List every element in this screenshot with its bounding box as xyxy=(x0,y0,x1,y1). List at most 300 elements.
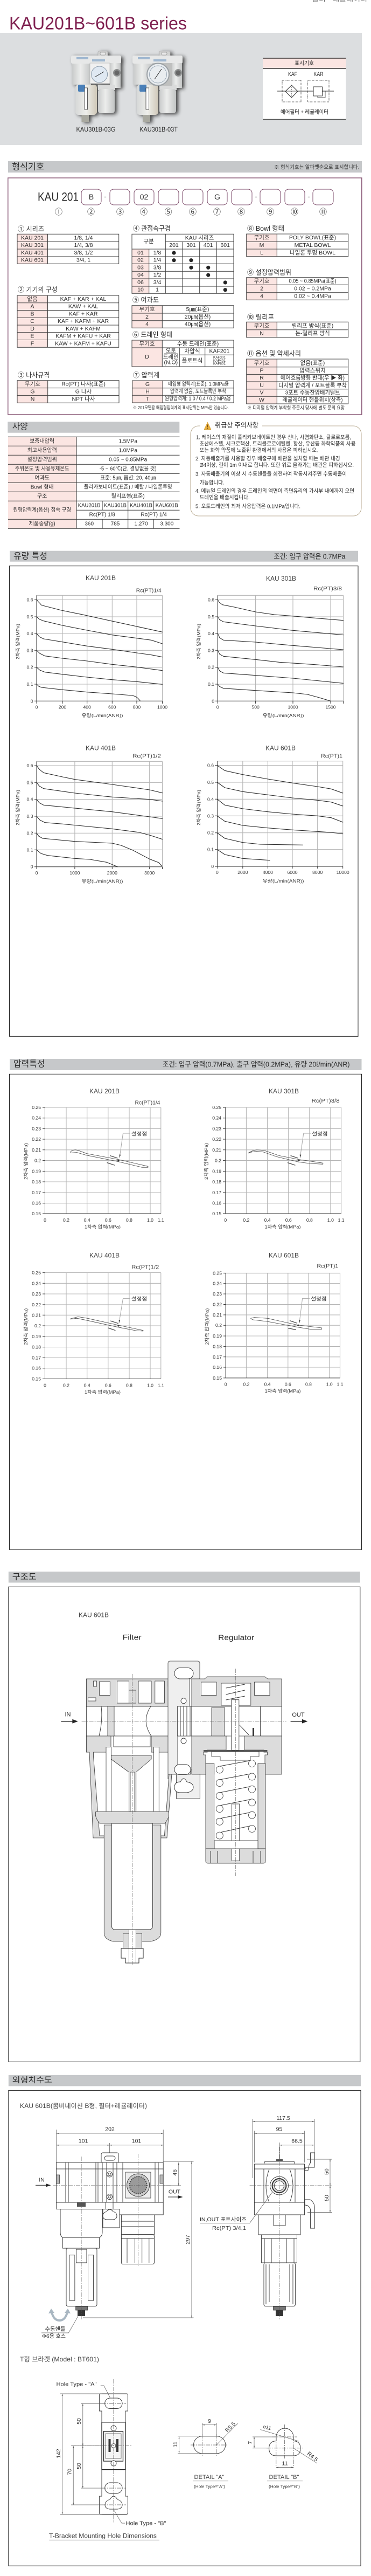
table: relief: 릴리프 방식(표준) xyxy=(292,322,333,329)
table: specifications: 제품중량(g) xyxy=(29,520,55,527)
dimension drawing: detail A xyxy=(172,2418,238,2489)
dimension drawing: side view: 117.5 xyxy=(276,2115,290,2122)
table: drain type: KAF601 xyxy=(213,362,226,366)
heading: structure xyxy=(9,1572,360,1583)
diagram labels xyxy=(65,1613,305,1718)
table: port size: 1/2 xyxy=(153,272,161,278)
line chart: KAU 201B pressure: 0.21 xyxy=(32,1147,41,1153)
line chart: KAU 201B flow: 0.2 xyxy=(27,665,33,670)
dimension drawing: side view: Rc(PT) 3/4,1 xyxy=(212,2225,246,2231)
model code row: ⑪ xyxy=(319,208,327,216)
line chart: KAU 601B pressure: 0.22 xyxy=(213,1301,222,1307)
table: specifications: -5 ~ 60℃(단, 결빙없을 것) xyxy=(100,465,157,472)
table: drain type: ⑥ 드레인 형태 xyxy=(132,331,172,339)
line chart: KAU 401B pressure: 0.4 xyxy=(84,1382,90,1388)
dimension drawing: T bracket: 70 xyxy=(67,2469,73,2475)
table: device configuration: KAFM + KAFU + KAR xyxy=(55,333,111,340)
table: set pressure range: 0.02 ~ 0.4MPa xyxy=(294,293,331,300)
line chart: KAU 601B pressure: 1.0 xyxy=(326,1381,333,1387)
line chart: KAU 301B pressure: 0.25 xyxy=(212,1105,221,1110)
line chart: KAU 601B pressure: 1.1 xyxy=(337,1381,344,1387)
line chart: KAU 401B pressure: 0 xyxy=(44,1382,46,1388)
line chart: KAU 401B pressure: 1.1 xyxy=(158,1382,164,1388)
dimension drawing: front view xyxy=(36,2126,194,2339)
diagram labels: IN xyxy=(65,1711,71,1718)
table: pressure gauge: ⑦ 압력계 xyxy=(133,371,159,379)
line chart: KAU 201B flow: 0.5 xyxy=(27,614,33,619)
table: drain type: D xyxy=(145,354,149,360)
dimension drawing: front view: 202 xyxy=(105,2126,115,2133)
model code row: ⑨ xyxy=(267,208,274,216)
line chart: KAU 201B pressure: 0.16 xyxy=(32,1201,41,1206)
line chart: KAU 201B pressure: 0.17 xyxy=(32,1190,41,1195)
line chart: KAU 201B pressure: 1차측 압력(MPa) xyxy=(85,1224,121,1230)
table: device configuration xyxy=(17,286,119,347)
line chart: KAU 301B flow: 1500 xyxy=(325,704,336,710)
table: set pressure range: 무기호 xyxy=(254,278,270,285)
line chart: KAU 301B flow: Rc(PT)3/8 xyxy=(313,586,342,592)
product caption: KAU301B-03G xyxy=(76,126,115,133)
table: device configuration: B xyxy=(30,311,34,317)
table: series: 1/4, 3/8 xyxy=(74,242,93,249)
line chart: KAU 301B flow: 2차측 압력(MPa) xyxy=(195,624,201,659)
heading: flow characteristics: 유량 특성 xyxy=(13,551,47,561)
line chart: KAU 201B pressure: Rc(PT)1/4 xyxy=(135,1099,160,1106)
table: drain type: 수동 드레인(표준) xyxy=(177,341,219,347)
line chart: KAU 601B pressure: 1차측 압력(MPa) xyxy=(265,1388,301,1394)
panel: structure diagram xyxy=(9,1587,360,2062)
panel: model code selection xyxy=(8,178,362,415)
product photo: KAU301B-03T xyxy=(132,51,183,122)
line chart: KAU 601B pressure: 0.23 xyxy=(213,1291,222,1297)
line chart: KAU 401B flow: 유량(L/min(ANR)) xyxy=(82,878,123,884)
line chart: KAU 201B pressure: 0.19 xyxy=(32,1168,41,1174)
table: drain type: 드레인 xyxy=(163,354,179,360)
dimension drawing: detail B: 11 xyxy=(282,2461,288,2467)
model code row: ⑧ xyxy=(237,208,245,216)
line chart: KAU 201B flow: 800 xyxy=(133,704,141,710)
line chart: KAU 401B pressure: 0.25 xyxy=(32,1270,41,1276)
spring xyxy=(216,1760,255,1839)
line chart: KAU 601B pressure xyxy=(204,1253,344,1394)
table: pressure gauge: 매입형 압력계(표준): 1.0MPa용 xyxy=(168,380,229,387)
table: specifications: 360 xyxy=(85,521,94,527)
table: specifications: 1.0MPa xyxy=(118,447,137,453)
line chart: KAU 301B flow: 0.5 xyxy=(208,614,214,619)
heading: model code: 형식기호 xyxy=(12,162,44,171)
dimension drawing: front view: 101 xyxy=(132,2138,141,2145)
line chart: KAU 601B pressure: Rc(PT)1 xyxy=(317,1263,339,1270)
panel: pressure characteristics xyxy=(10,1074,362,1549)
line chart: KAU 301B pressure: 0.22 xyxy=(212,1137,221,1142)
table: series: KAU 301 xyxy=(21,242,44,249)
model code row: G xyxy=(214,192,220,201)
line chart: KAU 301B pressure: 0.15 xyxy=(212,1211,221,1216)
table: relief: 논-릴리프 방식 xyxy=(295,330,330,337)
diagram labels: OUT xyxy=(292,1712,305,1718)
table: set pressure range: 4 xyxy=(260,293,263,300)
table: options and accessories: ⑪ 옵션 및 악세사리 xyxy=(247,350,301,357)
model code row: - xyxy=(307,192,310,201)
line chart: KAU 301B flow: 0.6 xyxy=(208,597,214,603)
table: set pressure range: 0.05 ~ 0.85MPa(표준) xyxy=(289,278,336,285)
cross-section: center bracket xyxy=(168,1661,200,1799)
arrow: out xyxy=(291,1720,307,1723)
table: specifications: 여과도 xyxy=(34,474,50,481)
product caption: KAU301B-03T xyxy=(139,126,178,133)
dimension drawing: side view: 50 xyxy=(324,2168,330,2175)
line chart: KAU 201B pressure: 0.2 xyxy=(63,1217,69,1223)
model code row: ① xyxy=(55,208,62,216)
line chart: KAU 601B flow: 8000 xyxy=(312,870,323,875)
line chart: KAU 601B pressure: 0 xyxy=(225,1381,227,1387)
line chart: KAU 201B flow: Rc(PT)1/4 xyxy=(136,587,162,594)
line chart: KAU 301B flow: 0.2 xyxy=(208,665,214,670)
model code row: KAU 201 xyxy=(38,190,79,204)
table: options and accessories: P xyxy=(260,368,264,374)
subheading: T bracket: T형 브라켓 (Model : BT601) xyxy=(20,2355,99,2363)
line chart: KAU 301B pressure: 0.2 xyxy=(215,1158,221,1163)
line chart: KAU 301B pressure: 0.21 xyxy=(212,1147,221,1153)
dimension drawing: T bracket: 142 xyxy=(55,2449,62,2458)
table: options and accessories: W xyxy=(259,397,264,403)
heading: structure: 구조도 xyxy=(12,1572,37,1582)
model code row: - xyxy=(255,192,257,201)
table: set pressure range: 0.02 ~ 0.2MPa xyxy=(294,286,331,292)
table: port size xyxy=(132,225,234,293)
line chart: KAU 201B pressure: 0.24 xyxy=(32,1115,41,1121)
table: device configuration: A xyxy=(30,304,34,310)
table: relief: 무기호 xyxy=(254,322,270,329)
table: series: ① 시리즈 xyxy=(18,225,44,233)
table: pressure gauge: T xyxy=(146,396,150,402)
table: drain type: KAF201 xyxy=(209,348,230,355)
table: device configuration: E xyxy=(30,333,34,340)
line chart: KAU 201B pressure xyxy=(23,1089,164,1230)
table: filtration: 4 xyxy=(145,321,149,328)
table: drain type: KAF301 xyxy=(213,356,226,360)
table: bowl type: ⑧ Bowl 형태 xyxy=(247,225,284,232)
line chart: KAU 201B pressure: 0.23 xyxy=(32,1126,41,1131)
table: thread standard: N xyxy=(31,396,34,402)
line chart: KAU 601B flow: 10000 xyxy=(337,870,349,875)
table: bowl type: 나일론 투명 BOWL xyxy=(290,249,335,256)
line chart: KAU 301B flow: 0 xyxy=(212,698,214,704)
line chart: KAU 601B flow: 0.4 xyxy=(207,796,214,802)
line chart: KAU 301B pressure: Rc(PT)3/8 xyxy=(312,1098,340,1104)
line chart: KAU 301B pressure: 0.2 xyxy=(243,1217,250,1223)
table: filtration xyxy=(132,297,234,328)
panel: pneumatic symbol: 에어필터 + 레귤레이터 xyxy=(281,109,328,115)
line chart: KAU 401B pressure: KAU 401B xyxy=(89,1253,120,1259)
line chart: KAU 601B flow xyxy=(195,745,349,884)
table: set pressure range: ⑨ 설정압력범위 xyxy=(247,268,291,276)
model code row: ⑥ xyxy=(189,208,197,216)
table: set pressure range: 2 xyxy=(260,286,263,292)
line chart: KAU 201B pressure: 0.15 xyxy=(32,1211,41,1216)
line chart: KAU 601B pressure: 0.18 xyxy=(213,1344,222,1349)
table: specifications: 0.05 ~ 0.85MPa xyxy=(109,457,148,463)
table: filtration: 2 xyxy=(145,314,149,320)
dimension drawing: front view: Φ6용 호스 xyxy=(42,2333,66,2339)
table: series: KAU 201 xyxy=(21,235,44,241)
line chart: KAU 601B pressure: 0.19 xyxy=(213,1333,222,1339)
line chart: KAU 601B flow: 0 xyxy=(211,864,214,869)
table: device configuration: 없음 xyxy=(27,295,38,302)
table: specifications: 1,270 xyxy=(134,521,148,527)
table: options and accessories: V xyxy=(260,389,264,396)
table: series: KAU 601 xyxy=(21,257,44,264)
table: filtration: ⑤ 여과도 xyxy=(132,297,159,304)
line chart: KAU 601B flow: 6000 xyxy=(287,870,298,875)
line chart: KAU 601B pressure: 0.8 xyxy=(305,1381,312,1387)
table: specifications: 폴리카보네이트(표준) / 메탈 / 나일론투명 xyxy=(84,483,172,490)
table: port size: 301 xyxy=(186,242,196,249)
table: options and accessories: 없음(표준) xyxy=(300,359,325,366)
table: thread standard: G 나사 xyxy=(75,388,92,395)
table: port size: 06 xyxy=(137,279,144,286)
line chart: KAU 301B flow: KAU 301B xyxy=(266,576,296,582)
line chart: KAU 401B pressure: 0.17 xyxy=(32,1355,41,1360)
table: options and accessories: 3포트 수동잔압배기밸브 xyxy=(285,389,340,396)
line chart: KAU 301B flow: 500 xyxy=(251,704,260,710)
dimension drawing: detail A: DETAIL "A" xyxy=(194,2474,225,2481)
callout: handling precautions: 1. 케이스의 재질이 폴리카보네이트인 경우 신나, 사염화탄소, 클로로포름, xyxy=(196,433,351,441)
line chart: KAU 401B pressure: 설정점 xyxy=(131,1296,147,1303)
line chart: KAU 201B flow: 0.1 xyxy=(27,681,33,687)
line chart: KAU 201B flow: 200 xyxy=(59,704,66,710)
table: pressure gauge xyxy=(132,371,234,410)
line chart: KAU 601B flow: 0 xyxy=(216,870,219,875)
line chart: KAU 601B flow: KAU 601B xyxy=(265,745,296,752)
model code row: ⑤ xyxy=(165,208,172,216)
line chart: KAU 401B flow: 0.2 xyxy=(27,830,33,836)
line chart: KAU 401B pressure: 0.21 xyxy=(32,1312,41,1318)
panel: outline dimensions xyxy=(9,2090,361,2566)
line chart: KAU 601B flow: 2000 xyxy=(237,870,248,875)
table: device configuration: KAF + KAFM + KAR xyxy=(58,318,109,325)
model code row: ⑦ xyxy=(213,208,221,216)
line chart: KAU 601B flow: 0.5 xyxy=(207,780,214,785)
table: relief: ⑩ 릴리프 xyxy=(247,313,274,321)
line chart: KAU 401B flow: 2차측 압력(MPa) xyxy=(15,790,20,825)
table: thread standard: Rc(PT) 나사(표준) xyxy=(61,381,106,388)
dimension drawing: detail A: 11 xyxy=(172,2441,179,2447)
model code row: ② xyxy=(87,208,95,216)
diagram labels: KAU 601B xyxy=(79,1613,109,1619)
heading: specifications xyxy=(8,422,179,433)
table: device configuration: KAW + KAFM + KAFU xyxy=(55,340,111,347)
line chart: KAU 401B flow: 3000 xyxy=(144,870,155,876)
line chart: KAU 201B pressure: 설정점 xyxy=(131,1131,147,1138)
panel: pneumatic symbol: 표시기호 xyxy=(295,60,314,67)
table: port size: 1/4 xyxy=(153,257,161,264)
dimension drawing: T bracket xyxy=(49,2379,166,2540)
table: specifications: 주위온도 및 사용유체온도 xyxy=(15,465,69,472)
heading: model code xyxy=(8,161,362,173)
table: options and accessories: U xyxy=(260,382,264,389)
callout: handling precautions: 가능합니다. xyxy=(199,480,224,486)
line chart: KAU 301B pressure: 0.19 xyxy=(212,1168,221,1174)
line chart: KAU 601B pressure: 0.17 xyxy=(213,1354,222,1360)
line chart: KAU 201B pressure: KAU 201B xyxy=(89,1089,120,1095)
callout: handling precautions: 또는 화학 약품에 노출된 환경에서의 사용은 피하십시오. xyxy=(199,446,318,454)
model code row: ③ xyxy=(116,208,124,216)
line chart: KAU 301B flow: 유량(L/min(ANR)) xyxy=(263,712,304,718)
heading: flow characteristics xyxy=(10,551,358,562)
heading: outline dimensions xyxy=(9,2075,361,2086)
line chart: KAU 401B pressure: 0.2 xyxy=(34,1323,41,1328)
dimension drawing: detail A: (Hole Type="A") xyxy=(194,2484,226,2489)
table: port size: 01 xyxy=(137,250,144,256)
line chart: KAU 301B pressure: 0.23 xyxy=(212,1126,221,1131)
table: port size: 1/8 xyxy=(153,250,161,256)
dimension drawing: detail B: (Hole Type="B") xyxy=(269,2484,300,2489)
model code row: 02 xyxy=(140,192,148,201)
dimension drawing: detail A: R5.5 xyxy=(224,2421,237,2434)
table: series: 3/4, 1 xyxy=(76,257,90,264)
line chart: KAU 401B flow: 0 xyxy=(36,870,38,876)
heading: flow characteristics: 조건: 입구 압력은 0.7MPa xyxy=(274,552,346,561)
panel: flow characteristics xyxy=(10,566,358,1036)
table: port size: 구분 xyxy=(143,238,154,245)
table: device configuration: D xyxy=(30,326,34,332)
line chart: KAU 401B flow: 0.5 xyxy=(27,780,33,785)
dimension drawing: front view: IN xyxy=(39,2177,45,2184)
line chart: KAU 601B pressure: 0.25 xyxy=(213,1270,222,1276)
line chart: KAU 401B pressure: 0.8 xyxy=(126,1382,132,1388)
heading: pressure characteristics: 조건: 입구 압력(0.7MPa), 출구 압력(0.2MPa), 유량 20ℓ/min(ANR) xyxy=(163,1060,350,1069)
line chart: KAU 301B flow xyxy=(195,576,344,718)
table: specifications: 최고사용압력 xyxy=(27,446,57,453)
line chart: KAU 601B pressure: 0.21 xyxy=(213,1312,222,1318)
line chart: KAU 401B flow: Rc(PT)1/2 xyxy=(132,753,161,760)
table: device configuration: KAF + KAR + KAL xyxy=(60,296,107,302)
line chart: KAU 301B flow: 0.4 xyxy=(208,631,214,636)
table: specifications: KAU401B xyxy=(130,502,152,508)
table: port size: 3/8 xyxy=(153,264,161,271)
table: drain type: 오토 xyxy=(166,348,176,354)
line chart: KAU 601B pressure: 0.6 xyxy=(285,1381,291,1387)
line chart: KAU 201B flow: 0.3 xyxy=(27,648,33,653)
dimension drawing: side view xyxy=(200,2115,332,2320)
line chart: KAU 601B pressure: 2차측 압력(MPa) xyxy=(204,1308,210,1345)
line chart: KAU 301B pressure: 2차측 압력(MPa) xyxy=(203,1143,209,1180)
table: thread standard: ③ 나사규격 xyxy=(18,371,50,379)
product photo: KAU301B-03G xyxy=(71,51,121,122)
line chart: KAU 401B flow: 1000 xyxy=(69,870,80,876)
table: drain type: 플로트식 xyxy=(182,357,202,364)
line chart: KAU 301B pressure: 0.16 xyxy=(212,1201,221,1206)
table: port size: 601 xyxy=(220,242,230,249)
line chart: KAU 601B pressure: 0.4 xyxy=(264,1381,271,1387)
line chart: KAU 401B flow: 2000 xyxy=(107,870,117,876)
table: series: KAU 401 xyxy=(21,250,44,256)
line chart: KAU 601B flow: 유량(L/min(ANR)) xyxy=(263,878,304,884)
table: relief xyxy=(247,313,348,338)
table: device configuration: KAW + KAFM xyxy=(66,326,101,332)
table: port size: 401 xyxy=(204,242,213,249)
diagram labels: Filter xyxy=(123,1634,142,1641)
table: options and accessories: 무기호 xyxy=(254,360,270,366)
table: series: 1/8, 1/4 xyxy=(74,235,93,241)
dimension drawing: detail B xyxy=(247,2424,319,2489)
cross-section: filter xyxy=(86,1674,178,1965)
dimension drawing: front view: OUT xyxy=(169,2189,181,2195)
line chart: KAU 201B flow xyxy=(15,575,167,718)
dimension drawing: detail B: 7 xyxy=(247,2441,254,2444)
line chart: KAU 301B pressure: 0.24 xyxy=(212,1115,221,1121)
panel: pneumatic symbol: KAF xyxy=(288,71,297,78)
line chart: KAU 601B pressure: 0.2 xyxy=(243,1381,250,1387)
table: port size: KAU 시리즈 xyxy=(185,235,214,241)
table: set pressure range xyxy=(247,268,348,300)
table: pressure gauge: H xyxy=(145,388,150,395)
dimension drawing: T bracket: 50 xyxy=(76,2463,82,2469)
table: pressure gauge: G xyxy=(145,381,150,388)
line chart: KAU 401B flow xyxy=(15,745,163,884)
line chart: KAU 401B flow: 0.1 xyxy=(27,847,33,852)
callout: handling precautions: 드레인을 배출시킵니다. xyxy=(199,494,250,501)
table: port size: 02 xyxy=(137,257,144,264)
line chart: KAU 201B pressure: 0.4 xyxy=(84,1217,90,1223)
heading: model code: ※ 형식기호는 알파벳순으로 표시합니다. xyxy=(274,164,359,170)
line chart: KAU 201B pressure: 0 xyxy=(44,1217,46,1223)
callout: handling precautions: 초산에스텔, 시크로핵산, 트리클로로에틸렌, 황산, 유산등 화학약품의 사용 xyxy=(199,440,355,447)
diagram labels: Regulator xyxy=(218,1634,255,1642)
dimension drawing: detail A: 9 xyxy=(208,2418,211,2425)
callout: handling precautions: 취급상 주의사항 xyxy=(215,422,258,429)
line chart: KAU 201B pressure: 0.25 xyxy=(32,1105,41,1110)
table: port size: 03 xyxy=(137,264,144,271)
table: relief: N xyxy=(260,330,264,337)
table: specifications: Bowl 형태 xyxy=(31,484,54,490)
dimension drawing: front view: 101 xyxy=(79,2138,88,2145)
table: device configuration: F xyxy=(31,340,34,347)
table: bowl type: M xyxy=(260,242,264,249)
line chart: KAU 201B flow: 2차측 압력(MPa) xyxy=(15,624,20,659)
line chart: KAU 601B flow: 2차측 압력(MPa) xyxy=(195,790,201,825)
table: drain type: 차압식 xyxy=(185,348,200,355)
line chart: KAU 601B flow: Rc(PT)1 xyxy=(321,753,342,760)
table: bowl type xyxy=(247,225,348,257)
dimension drawing: T bracket: 50 xyxy=(76,2418,82,2425)
table: options and accessories: R xyxy=(260,375,264,381)
table: specifications: 구조 xyxy=(37,493,47,499)
line chart: KAU 201B pressure: 0.18 xyxy=(32,1179,41,1184)
line chart: KAU 401B flow: 0.3 xyxy=(27,814,33,819)
line chart: KAU 601B flow: 0.1 xyxy=(207,847,214,852)
line chart: KAU 601B pressure: 0.15 xyxy=(213,1375,222,1381)
line chart: KAU 301B flow: 0 xyxy=(216,704,219,710)
table: bowl type: POLY BOWL(표준) xyxy=(289,235,336,241)
line chart: KAU 401B pressure: 1.0 xyxy=(147,1382,153,1388)
table: device configuration: C xyxy=(30,318,34,325)
icon: rotation arrows xyxy=(52,2312,67,2320)
dimension drawing: detail B: ⌀11 xyxy=(262,2424,272,2432)
table: options and accessories: ※ 디지털 압력계 부착형 주문시 당사에 별도 문의 요망 xyxy=(247,405,345,411)
line chart: KAU 601B flow: 0.6 xyxy=(207,763,214,768)
panel: pneumatic symbol: KAR xyxy=(313,71,324,78)
callout: handling precautions: 3. 자동배출기의 이상 시 수동핸들을 회전하여 작동시켜주면 수동배출이 xyxy=(195,470,347,478)
line chart: KAU 201B flow: KAU 201B xyxy=(86,575,116,582)
heading: specifications: 사양 xyxy=(12,422,28,431)
table: pressure gauge: 압력계 없음, 포트블록만 부착 xyxy=(170,388,226,395)
table: filtration: 40㎛(옵션) xyxy=(185,321,211,328)
dimension drawing: side view: 95 xyxy=(276,2126,282,2133)
line chart: KAU 401B pressure: 0.23 xyxy=(32,1291,41,1297)
line chart: KAU 401B pressure: 1차측 압력(MPa) xyxy=(85,1389,121,1395)
